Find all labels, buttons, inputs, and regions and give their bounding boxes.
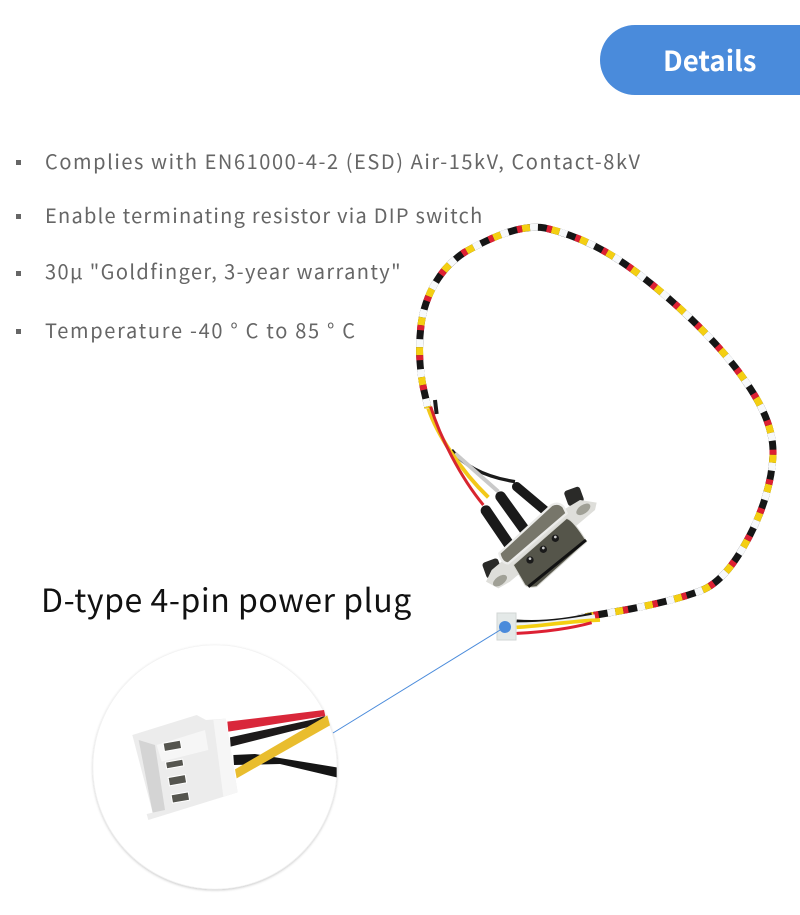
plug title: D-type 4-pin power plug bbox=[41, 576, 412, 622]
loose wires bbox=[428, 400, 600, 633]
magnified housing bbox=[132, 715, 238, 820]
feature: ESD: Complies with EN61000-4-2 (ESD) Air-15kV, Contact-8kV bbox=[45, 146, 642, 175]
shell rim bbox=[499, 504, 567, 563]
bullet 2 bbox=[16, 214, 21, 219]
plug-side wires bbox=[517, 614, 592, 621]
rear screw posts bbox=[563, 486, 585, 507]
bullet 3 bbox=[16, 271, 21, 276]
pins bbox=[526, 556, 534, 564]
magnified wires bbox=[227, 710, 325, 732]
bullet 4 bbox=[16, 329, 21, 334]
twisted cable bbox=[420, 227, 773, 618]
feature: terminating resistor: Enable terminating resistor via DIP switch bbox=[45, 200, 484, 229]
feature: temperature: Temperature -40 ° C to 85 ° C bbox=[45, 315, 357, 344]
callout leader line bbox=[333, 627, 505, 733]
D-type connector bbox=[428, 400, 600, 633]
heading text: Details bbox=[663, 39, 756, 79]
callout dot bbox=[499, 621, 511, 633]
metal flange bbox=[486, 500, 597, 588]
feature list bbox=[16, 146, 642, 344]
feature: goldfinger: 30μ "Goldfinger, 3-year warranty" bbox=[45, 256, 402, 285]
magnified plug circle bbox=[93, 645, 337, 889]
magnified contacts bbox=[163, 740, 190, 803]
bullet 1 bbox=[16, 160, 21, 165]
details heading pill bbox=[600, 25, 800, 95]
wire boots bbox=[486, 487, 548, 548]
connector body bbox=[513, 518, 587, 587]
small white plug bbox=[497, 613, 516, 640]
